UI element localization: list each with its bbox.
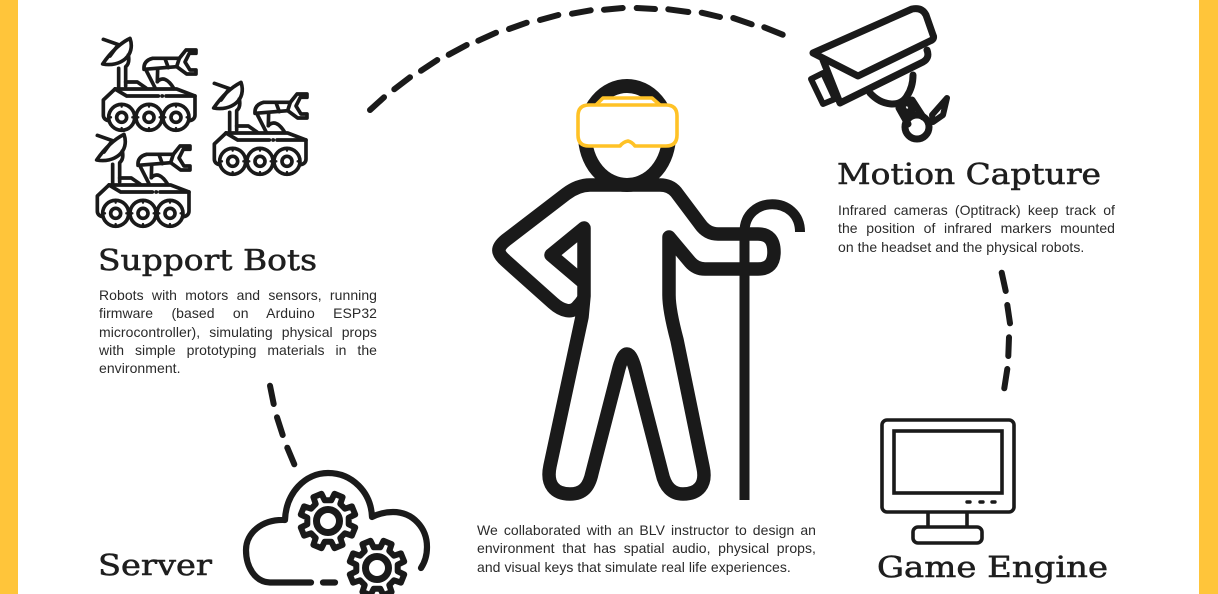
text: support bots description: firmware (based on Arduino ESP32 — [99, 305, 377, 321]
icon: three support robots — [97, 38, 307, 226]
icon: computer monitor — [882, 420, 1014, 543]
heading: Server: Server — [98, 548, 212, 582]
icon: motion capture camera — [811, 9, 947, 139]
head — [585, 86, 669, 185]
heading: Motion Capture: Motion Capture — [837, 157, 1101, 191]
heading: Support Bots: Support Bots — [98, 243, 317, 277]
right yellow border — [1199, 0, 1218, 594]
text: motion capture description: on the headset and the physical robots. — [838, 239, 1084, 255]
icon: cloud server with gears — [246, 473, 427, 594]
arrow: dashed line from support bots to server — [270, 386, 294, 464]
text: support bots description: microcontroller), simulating physical props — [99, 324, 377, 340]
text: support bots description — [99, 287, 377, 376]
text: support bots description: with simple prototyping materials in the — [99, 342, 377, 358]
text: motion capture description: Infrared cameras (Optitrack) keep track of — [838, 202, 1115, 218]
text: support bots description: Robots with motors and sensors, running — [99, 287, 377, 303]
body outline — [499, 185, 774, 494]
VR headset — [578, 98, 677, 146]
left yellow border — [0, 0, 18, 594]
heading: Game Engine: Game Engine — [877, 550, 1108, 584]
cane — [744, 204, 800, 500]
text: center description: and visual keys that simulate real life experiences. — [477, 559, 791, 575]
arrow: dashed arc from support bots to motion capture — [370, 8, 783, 110]
text: motion capture description: the position of infrared markers mounted — [838, 220, 1115, 236]
icon: figure with VR headset and cane — [499, 86, 800, 500]
text: center description: We collaborated with an BLV instructor to design an — [477, 522, 816, 538]
text: motion capture description — [838, 202, 1115, 255]
text: center description — [477, 522, 816, 575]
text: support bots description: environment. — [99, 360, 181, 376]
arrow: dashed line from motion capture to game engine — [1002, 273, 1010, 388]
text: center description: environment that has spatial audio, physical props, — [477, 540, 816, 556]
